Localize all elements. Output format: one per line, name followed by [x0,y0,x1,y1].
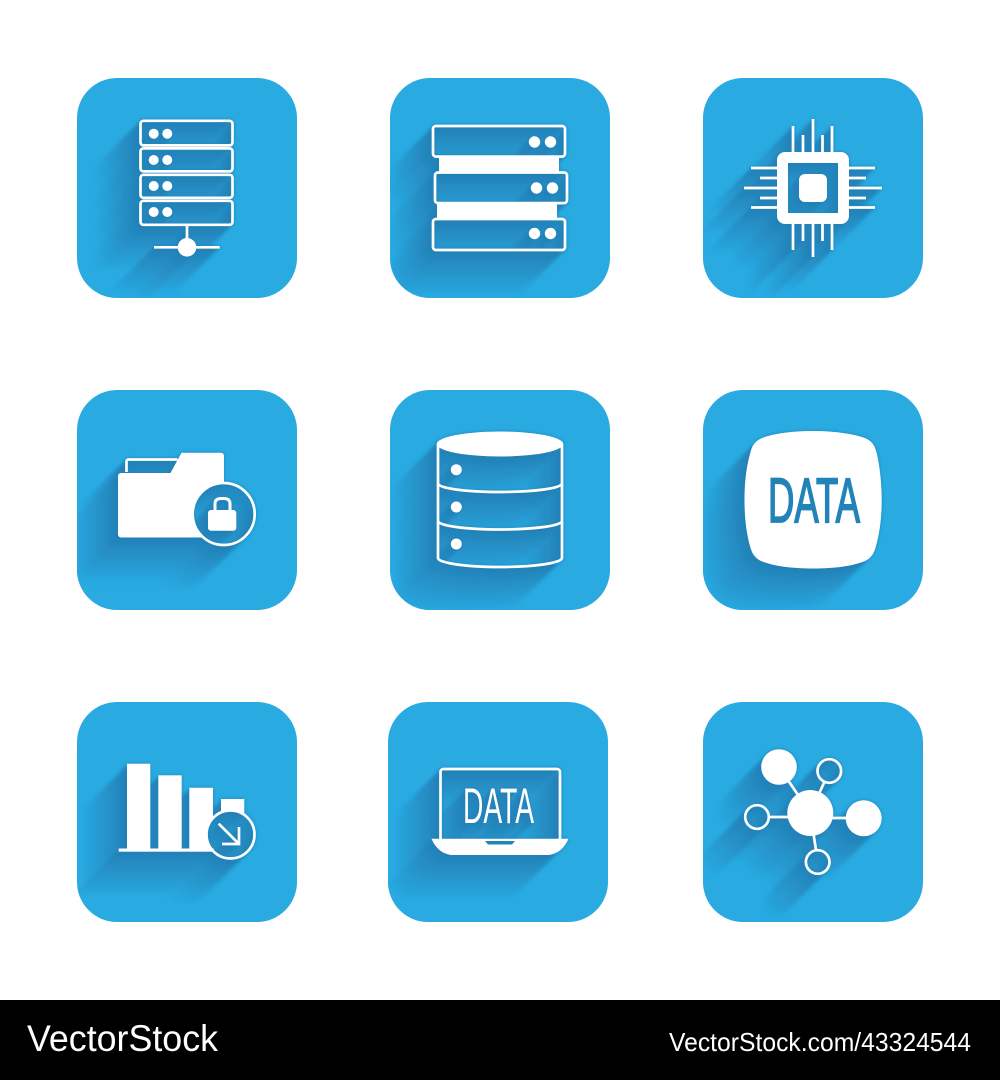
long shadow: server rack [95,121,233,302]
panel: network molecule [700,702,923,922]
long shadow: falling bar chart [73,764,254,904]
long shadow: server stack [387,126,567,296]
long shadow: database cylinder [391,432,563,613]
icon: server rack [140,121,232,257]
panel: falling bar chart [73,702,297,922]
icon: database cylinder [437,432,563,567]
panel: server stack [387,78,610,298]
panel: server rack with network node [77,78,297,302]
panel: database cylinder [390,390,610,613]
text: DATA: DATA [768,466,860,536]
long shadow: processor chip [709,118,883,292]
panel: locked folder [72,390,297,610]
panel: processor chip [698,78,923,303]
icon: DATA badge shape [744,431,882,568]
icon: locked folder [118,453,255,545]
long shadow: locked folder [72,453,255,591]
footer band [0,1000,1000,1080]
icon: laptop with DATA [432,769,568,855]
footer image id text: VectorStock.com/43324544 [669,1027,971,1057]
panel: laptop with DATA [386,702,608,922]
long shadow: laptop [386,769,568,901]
icon: falling bar chart [119,764,254,858]
long shadow: network molecule [700,749,882,919]
footer logo text: VectorStock [27,1018,218,1059]
panel: DATA badge [699,390,923,614]
icon: network molecule [745,749,882,874]
long shadow: DATA badge [699,431,882,614]
icon: laptop with DATA: DATA [463,778,534,834]
icon: server stack [433,126,567,250]
icon: processor chip [744,119,882,257]
